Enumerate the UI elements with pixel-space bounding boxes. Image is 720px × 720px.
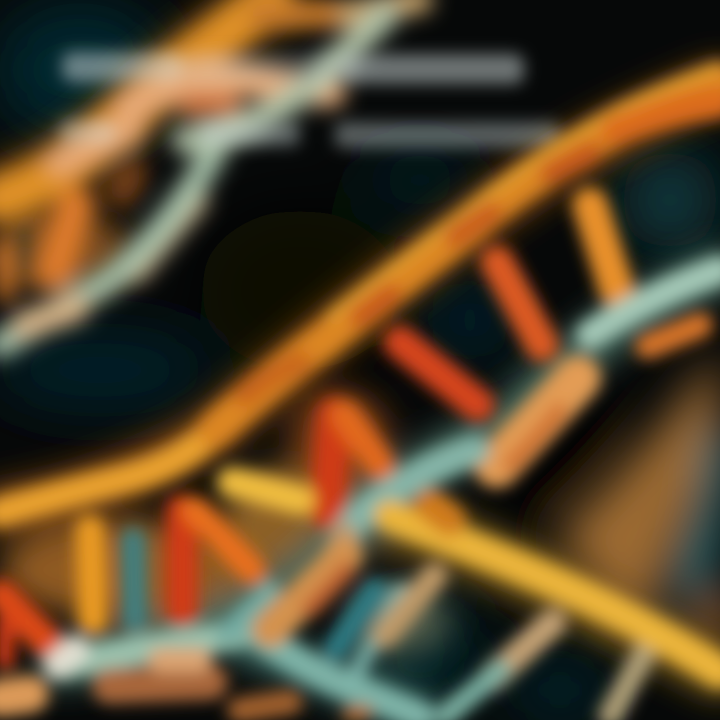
strand: yellow lower backbone xyxy=(390,505,720,672)
strand: pale teal main backbone xyxy=(58,270,720,716)
rung: large peach rung xyxy=(497,378,578,465)
rungs: upper-left helix xyxy=(3,175,195,295)
rungs: upper right xyxy=(400,205,700,405)
strand: upper-left orange backbone xyxy=(0,0,270,198)
rungs: lower strand peach and teal xyxy=(270,555,645,716)
strand: orange upper backbone xyxy=(0,66,720,512)
subtitle line 2 xyxy=(60,120,560,148)
region: brown out-of-focus strand on the right xyxy=(510,350,720,630)
title: illegible heading lines as blurred smudges xyxy=(60,52,560,148)
strand: bottom peach and brown band xyxy=(0,660,365,714)
title line 1 xyxy=(62,52,524,84)
strand: upper-left helix, out of focus xyxy=(0,0,420,345)
strand: upper-left pale teal backbone xyxy=(0,150,215,345)
rungs: lower left red and orange xyxy=(2,415,380,660)
